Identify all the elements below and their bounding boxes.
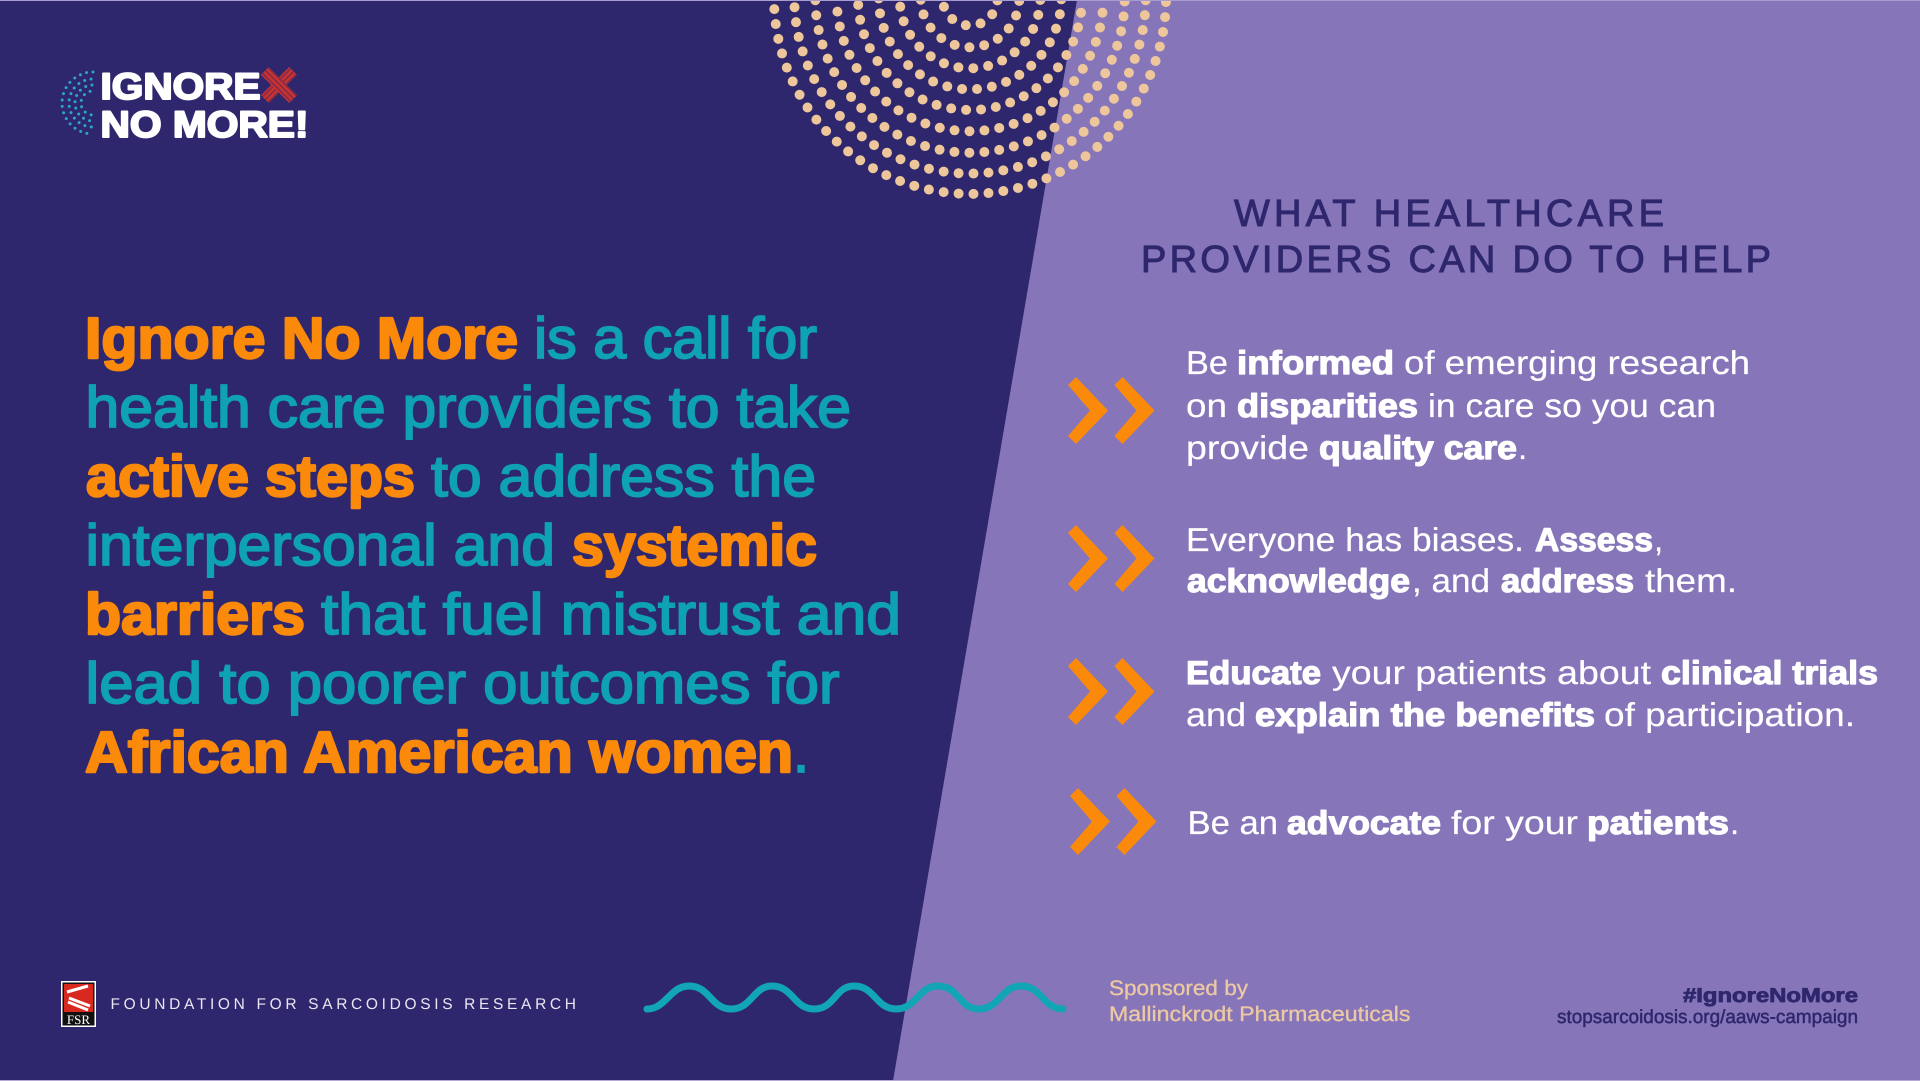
item 2 text: them. xyxy=(1645,562,1737,599)
main statement text block: lead to poorer outcomes for xyxy=(86,651,840,716)
campaign hashtag and url: #IgnoreNoMore xyxy=(1683,985,1858,1007)
item 1 text: of emerging research xyxy=(1404,344,1750,381)
icon: double chevron xyxy=(1068,377,1154,444)
item 3 text: and xyxy=(1186,696,1246,733)
main statement text block: interpersonal and xyxy=(86,513,555,578)
item 1 text: informed xyxy=(1237,344,1394,381)
main statement text block: is a call for xyxy=(534,306,817,371)
item 4 text: patients xyxy=(1587,804,1729,841)
item 2 text: Assess xyxy=(1535,521,1653,558)
icon: red striped X xyxy=(261,67,297,103)
item 2 text: , and xyxy=(1412,562,1490,599)
heading: what healthcare providers can do: PROVIDERS CAN DO TO HELP xyxy=(1141,239,1771,281)
main statement text block: . xyxy=(793,720,809,785)
icon: double chevron xyxy=(1068,525,1154,592)
main statement text block: Ignore No More xyxy=(85,306,518,371)
item 1 text: quality care xyxy=(1319,429,1517,466)
heading: what healthcare providers can do xyxy=(1141,193,1771,281)
icon: double chevron xyxy=(1070,788,1156,855)
heading: what healthcare providers can do: WHAT HEALTHCARE xyxy=(1234,193,1664,235)
organisation name: FOUNDATION FOR SARCOIDOSIS RESEARCH xyxy=(110,996,576,1013)
decorative teal wave xyxy=(647,986,1063,1009)
item 3 text: explain the benefits xyxy=(1255,696,1595,733)
item 1 text: on xyxy=(1186,387,1227,424)
logo wordmark line 2: NO MORE! xyxy=(100,104,308,145)
item 1 text xyxy=(1186,344,1750,466)
main statement text block: barriers xyxy=(85,582,305,647)
main statement text block xyxy=(85,306,901,785)
icon: teal dotted half circle xyxy=(62,72,93,134)
campaign hashtag and url xyxy=(1557,985,1858,1028)
item 2 text xyxy=(1186,521,1737,599)
item 1: be informed xyxy=(1068,344,1750,466)
sponsor text: Mallinckrodt Pharmaceuticals xyxy=(1109,1003,1410,1026)
icon: double chevron xyxy=(1068,658,1154,725)
item 3 text: clinical trials xyxy=(1661,654,1878,691)
item 1 text: disparities xyxy=(1237,387,1418,424)
item 3 text: your patients about xyxy=(1332,654,1651,691)
sponsor text xyxy=(1109,977,1410,1026)
item 1 text: . xyxy=(1518,429,1527,466)
main statement text block: that fuel mistrust and xyxy=(321,582,901,647)
item 4 text: for your xyxy=(1451,804,1578,841)
panel: navy left background xyxy=(0,0,1077,1081)
logo wordmark line 1: IGNORE xyxy=(100,66,260,107)
item 3 text: of participation. xyxy=(1604,696,1855,733)
item 1 text: in care so you can xyxy=(1428,387,1716,424)
campaign hashtag and url: stopsarcoidosis.org/aaws-campaign xyxy=(1557,1007,1858,1028)
sponsor text: Sponsored by xyxy=(1109,977,1249,1000)
main statement text block: to address the xyxy=(431,444,816,509)
icon: FSR badge: FSR xyxy=(67,1012,90,1027)
item 2 text: address xyxy=(1501,562,1634,599)
item 3: educate xyxy=(1068,654,1878,733)
item 1 text: Be xyxy=(1186,344,1228,381)
item 2 text: Everyone has biases. xyxy=(1186,521,1524,558)
main statement text block: health care providers to take xyxy=(86,375,851,440)
main statement text block: systemic xyxy=(572,513,817,578)
item 4 text xyxy=(1188,804,1739,841)
decorative dotted concentric half circles xyxy=(774,0,1166,194)
item 2 text: , xyxy=(1654,521,1663,558)
main statement text block: African American women xyxy=(85,720,793,785)
item 3 text: Educate xyxy=(1186,654,1321,691)
item 4 text: . xyxy=(1730,804,1739,841)
item 4: advocate xyxy=(1070,788,1739,855)
item 4 text: advocate xyxy=(1287,804,1441,841)
item 3 text xyxy=(1186,654,1878,733)
main statement text block: active steps xyxy=(86,444,415,509)
logo: Ignore No More xyxy=(62,66,308,145)
item 2 text: acknowledge xyxy=(1187,562,1410,599)
logo: Foundation for Sarcoidosis Research xyxy=(61,981,576,1027)
item 1 text: provide xyxy=(1186,429,1309,466)
item 2: biases xyxy=(1068,521,1737,599)
item 4 text: Be an xyxy=(1188,804,1278,841)
icon: FSR badge xyxy=(61,981,96,1027)
